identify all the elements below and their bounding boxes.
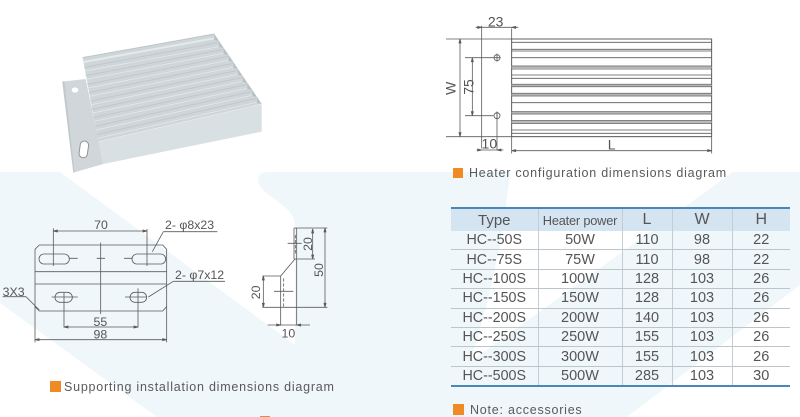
bracket side view (262, 228, 327, 326)
specification table: 100W (561, 271, 599, 287)
mounting plate (62, 79, 103, 173)
dimension labels: 10 (281, 327, 295, 341)
specification table: 22 (753, 232, 769, 248)
dimension labels: 20 (301, 237, 315, 251)
dimension labels: 20 (249, 285, 263, 299)
specification table: HC--250S (462, 329, 526, 345)
bracket front view (3, 228, 225, 342)
specification table: 26 (753, 329, 769, 345)
specification table: HC--75S (466, 252, 522, 268)
dimension labels: 2- φ7x12 (175, 268, 224, 282)
specification table: 26 (753, 271, 769, 287)
specification table: Heater power (543, 212, 617, 228)
caption: heater configuration: Heater configuration dimensions diagram (469, 166, 727, 180)
caption: supporting installation: Supporting installation dimensions diagram (64, 380, 335, 394)
specification table: 75W (565, 252, 595, 268)
dimension labels: 75 (461, 79, 477, 95)
specification table: 110 (635, 252, 659, 268)
specification table: 110 (635, 232, 659, 248)
specification table: 103 (690, 290, 714, 306)
dimension labels: 98 (93, 327, 107, 341)
specification table: 98 (694, 252, 710, 268)
specification table: HC--100S (462, 271, 526, 287)
specification table: HC--500S (462, 368, 526, 384)
specification table: 103 (690, 329, 714, 345)
specification table: HC--50S (466, 232, 522, 248)
specification table: HC--200S (462, 310, 526, 326)
dimension labels: 50 (312, 263, 326, 277)
note: accessories: Note: accessories (470, 403, 582, 417)
heater fins (83, 34, 262, 142)
dimension lines (446, 26, 712, 152)
specification table: 26 (753, 290, 769, 306)
specification table: 500W (561, 368, 599, 384)
dimension labels: 55 (93, 315, 107, 329)
dimension labels: 2- φ8x23 (165, 218, 214, 232)
specification table: 285 (635, 368, 659, 384)
specification table: 103 (690, 271, 714, 287)
specification table: L (643, 211, 651, 228)
specification table: 26 (753, 310, 769, 326)
specification table: 155 (635, 329, 659, 345)
dimension labels: L (608, 137, 616, 153)
specification table: 250W (561, 329, 599, 345)
dimension labels: 70 (94, 218, 108, 232)
specification table: 128 (635, 290, 659, 306)
specification table: HC--150S (462, 290, 526, 306)
specification table: 128 (635, 271, 659, 287)
specification table: 30 (753, 368, 769, 384)
dimension labels: 10 (482, 136, 497, 152)
specification table: 155 (635, 349, 659, 365)
specification table (451, 207, 790, 387)
specification table: 103 (690, 349, 714, 365)
fin block (512, 28, 712, 153)
specification table: 150W (561, 290, 599, 306)
specification table: 22 (753, 252, 769, 268)
specification table: W (694, 211, 710, 228)
dimension labels: W (443, 81, 459, 95)
specification table: 50W (565, 232, 595, 248)
specification table: HC--300S (462, 349, 526, 365)
specification table: Type (478, 212, 511, 228)
specification table: 98 (694, 232, 710, 248)
specification table: 103 (690, 310, 714, 326)
dimension labels: 3X3 (3, 285, 25, 299)
orange marker cut off at bottom edge (260, 416, 270, 417)
specification table: 103 (690, 368, 714, 384)
dimension labels (443, 13, 616, 153)
specification table: 140 (635, 310, 659, 326)
dimension labels: 23 (488, 13, 504, 29)
specification table: 300W (561, 349, 599, 365)
heater front face (98, 104, 262, 164)
specification table: 200W (561, 310, 599, 326)
specification table: 26 (753, 349, 769, 365)
dimension labels (3, 218, 326, 341)
specification table: H (755, 211, 767, 228)
